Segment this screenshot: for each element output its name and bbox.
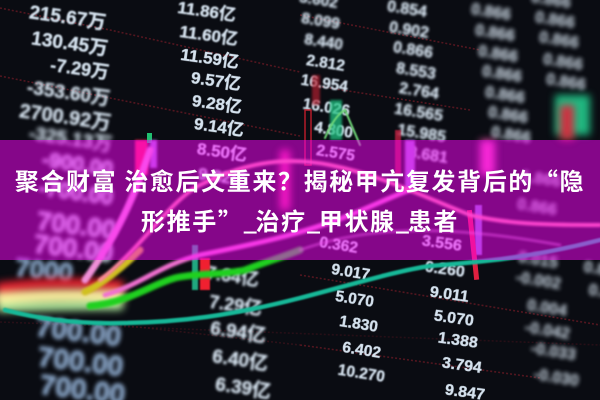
number column 4: 0.902	[388, 19, 430, 42]
number column 3: 5.070	[334, 288, 375, 311]
number column 2: 9.28亿	[191, 91, 243, 117]
curve: yellow line	[85, 250, 140, 292]
number column 1: 130.45万	[30, 28, 109, 60]
number column 1: -353.60万	[26, 78, 111, 110]
number column 6: 0.866	[516, 196, 558, 219]
number column 3: 0.362	[318, 234, 359, 257]
number column 6: 0.866	[538, 29, 580, 52]
number column 5: 3.556	[421, 233, 463, 255]
number column 5: 0.260	[424, 259, 466, 281]
number column 6: -0.033	[530, 340, 577, 364]
number column 1: 700.00	[32, 228, 115, 268]
number column 5: 0.866	[470, 1, 512, 24]
number column 2: 9.57亿	[190, 68, 242, 94]
number column 4: 16.565	[393, 101, 444, 125]
number column 3: 8.099	[300, 10, 341, 33]
number column 2: 6.94亿	[209, 317, 267, 347]
number column 3: 2.812	[305, 52, 346, 75]
number column 5: 0.866	[474, 22, 516, 45]
number column 5	[421, 1, 532, 400]
rainbow glow at left	[0, 283, 120, 308]
title: 聚合财富 治愈后文重来？揭秘甲亢复发背后的“隐	[15, 162, 585, 197]
number column 6: 0.015	[517, 249, 559, 272]
number column 1: 215.67万	[28, 2, 107, 34]
number column 1: 2700.92万	[18, 100, 112, 135]
number column 2: 11.59亿	[179, 45, 240, 72]
number column 5: 0.866	[487, 104, 529, 127]
number column 2: 7.29亿	[208, 292, 263, 319]
number column 2: 7.64亿	[205, 263, 260, 290]
line chart traces	[0, 110, 600, 323]
number column 1: 700.00	[34, 311, 123, 352]
number column 2	[176, 0, 272, 400]
number column 4: 8.553	[395, 60, 437, 83]
number column 3: 6.402	[341, 339, 382, 362]
curve: pink lines	[105, 190, 410, 295]
number column 6: 1.866	[520, 168, 562, 191]
number column 4: 2.764	[398, 80, 440, 103]
number column 5: 0.866	[484, 84, 526, 107]
purple title band	[0, 140, 600, 260]
number column 3: 8.440	[303, 31, 344, 54]
number column 3: 9.017	[330, 261, 371, 284]
number column 3: 4.800	[313, 119, 354, 142]
number column 1: 700.00	[35, 205, 118, 245]
number column 6: 0.004	[526, 297, 568, 320]
number column 6	[515, 0, 600, 390]
number column 5: 5.070	[433, 308, 475, 330]
number column 1	[14, 2, 127, 400]
number column 2: 8.50亿	[196, 139, 248, 165]
number column 3: 16.954	[300, 72, 349, 96]
number column 3: 16.026	[302, 96, 351, 120]
title: 形推手”_治疗_甲状腺_患者	[141, 202, 459, 237]
number column 1: -325.13万	[28, 124, 113, 156]
number column 6: 0.866	[545, 71, 587, 94]
number column 1: 7000	[14, 252, 75, 288]
title	[15, 162, 585, 237]
number column 4: 3.681	[407, 144, 449, 167]
number column 6: -0.002	[515, 269, 562, 293]
number column 5: 0.866	[490, 124, 532, 147]
number column 5: 3.794	[441, 355, 483, 377]
number column 3: 10.270	[337, 362, 386, 386]
number column 3: 2.575	[315, 142, 356, 165]
number column 3: 1.830	[338, 313, 379, 336]
number column 2: 9.14亿	[193, 114, 245, 140]
curve: teal line	[5, 240, 600, 323]
number column 4: 15.985	[396, 122, 447, 146]
number column 1: -700.00	[37, 175, 115, 210]
number column 2: 11.60亿	[178, 22, 239, 49]
number column 6: -0.042	[524, 319, 571, 343]
curve: green line	[90, 250, 300, 306]
number column 5: 9.011	[429, 284, 470, 306]
number column 1: -900.00	[41, 148, 115, 181]
number column 1: 700.00	[36, 341, 125, 382]
number column 6: -0.030	[533, 366, 580, 390]
number column 6: 0.866	[542, 51, 584, 74]
number column 3	[298, 0, 386, 386]
number column 5: 0.866	[477, 43, 519, 66]
number column 6: 0.866	[534, 9, 576, 32]
number column 1: -7.29万	[49, 55, 110, 83]
number column 5: 0.866	[481, 63, 523, 86]
number column 2: 9.82亿	[197, 164, 249, 190]
number column 4	[386, 0, 449, 167]
number column 2: 6.40亿	[211, 345, 269, 375]
number column 5: 1.388	[437, 330, 479, 352]
number column 4: 0.866	[392, 39, 434, 62]
candlesticks	[135, 75, 590, 290]
